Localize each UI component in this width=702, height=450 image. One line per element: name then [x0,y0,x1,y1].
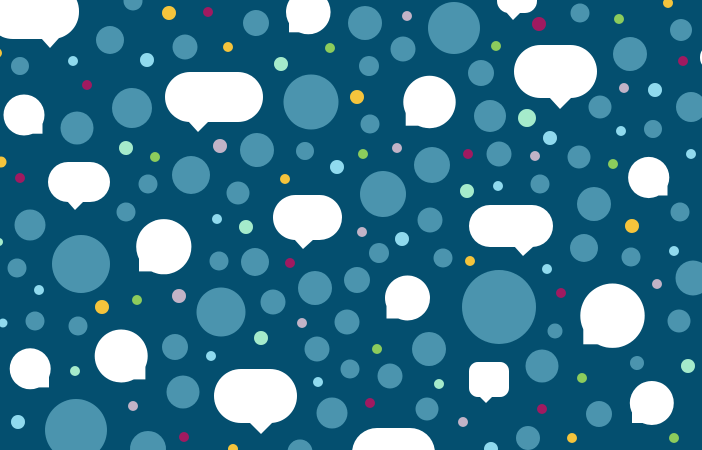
mauve dots [128,11,662,427]
mint dots [0,57,695,389]
green dots [132,14,679,443]
